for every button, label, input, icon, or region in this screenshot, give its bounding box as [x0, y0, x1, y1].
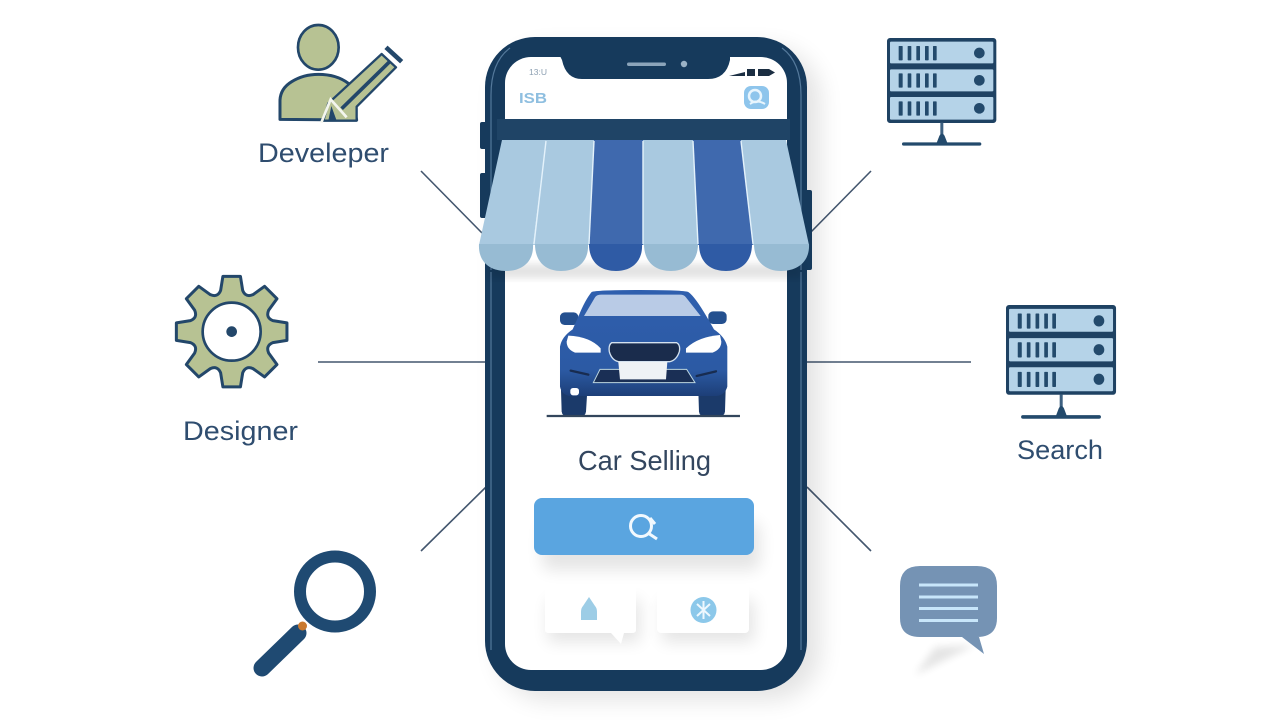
header icon	[744, 86, 769, 109]
icon: server search	[1007, 306, 1115, 418]
fog lamp	[570, 388, 579, 395]
status signal icons	[729, 69, 775, 76]
phone title: Car Selling	[578, 445, 711, 476]
gear center dot	[226, 326, 237, 337]
icon: developer	[280, 25, 402, 123]
icon: server top	[888, 39, 996, 145]
awning bar	[497, 119, 790, 140]
license plate	[618, 362, 667, 379]
search icon	[630, 516, 657, 539]
pencil	[321, 47, 402, 123]
car body	[560, 290, 727, 396]
mirrors	[560, 311, 727, 325]
bezel highlights	[491, 48, 801, 650]
person body	[280, 74, 357, 120]
stripe 4	[643, 140, 698, 271]
left card shadow	[548, 600, 640, 642]
notch	[560, 56, 730, 79]
phone drop shadow	[498, 48, 820, 700]
person head	[298, 25, 339, 70]
grille	[609, 343, 680, 362]
left headlight	[567, 336, 601, 353]
right card shadow	[662, 600, 754, 642]
awning shadow	[490, 264, 802, 278]
header label: ISB	[519, 90, 547, 107]
side vents	[571, 371, 716, 376]
phone side buttons	[480, 122, 812, 270]
gear outline	[176, 276, 287, 387]
right headlight	[686, 335, 721, 353]
ground line	[547, 412, 740, 419]
wheels	[561, 390, 726, 417]
right card icon	[690, 597, 716, 623]
stripe 5	[693, 140, 753, 271]
bubble body	[900, 566, 997, 654]
stripe 6	[741, 140, 809, 271]
status time: 13:U	[529, 68, 547, 77]
handle	[262, 633, 298, 668]
stripe 2	[533, 140, 594, 271]
windshield	[584, 295, 701, 316]
right card	[657, 585, 749, 633]
stripe 1	[479, 140, 546, 271]
icon: magnifying glass	[262, 556, 370, 668]
icon: chat bubble	[900, 566, 997, 675]
phone screen	[505, 57, 787, 670]
stripe 3	[589, 140, 643, 271]
label: developer: Develeper	[258, 138, 389, 168]
connector lines	[318, 171, 971, 551]
awning	[479, 119, 809, 278]
notch camera	[681, 61, 687, 67]
icon: gear	[176, 276, 287, 387]
notch speaker	[627, 62, 666, 66]
bubble shadow	[915, 645, 975, 675]
label: designer: Designer	[183, 416, 298, 446]
phone	[480, 37, 812, 691]
bubble text lines	[919, 585, 978, 620]
search button shadow	[542, 522, 760, 570]
left card	[545, 585, 636, 644]
gear inner ring	[203, 303, 261, 361]
phone body	[485, 37, 807, 691]
lens ring	[300, 556, 370, 626]
stripe highlights	[534, 141, 753, 244]
car illustration	[547, 290, 740, 417]
search button	[534, 498, 754, 555]
lower intake	[593, 369, 695, 383]
label: search: Search	[1017, 435, 1103, 465]
left card icon	[581, 597, 597, 620]
connector	[298, 622, 307, 630]
